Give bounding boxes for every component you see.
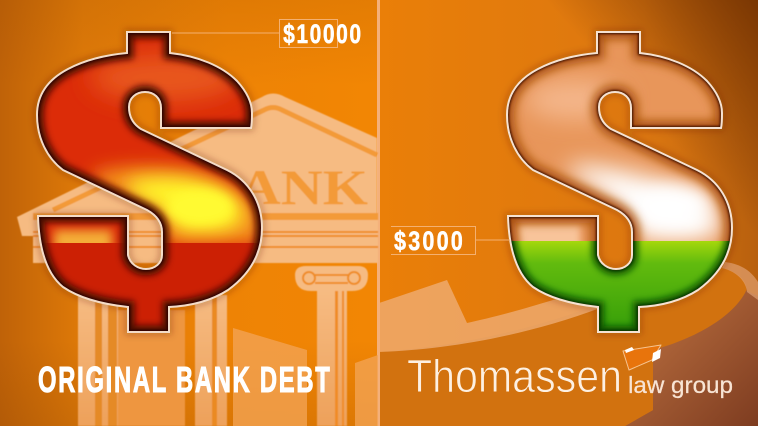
roof inner band — [53, 108, 377, 210]
background: lower right brown area — [625, 290, 758, 426]
right column — [317, 291, 347, 426]
left column — [78, 295, 118, 426]
panel: left background — [0, 0, 379, 426]
orange halo — [95, 166, 262, 243]
callout: $3000 — [391, 226, 510, 257]
left dollar sign — [30, 25, 270, 343]
logo tagline: law group — [628, 372, 733, 398]
background: orange swoosh body — [379, 268, 746, 426]
middle column — [195, 295, 227, 426]
callout: $10000: $10000 — [283, 20, 361, 50]
bank illustration — [17, 94, 378, 426]
bank roof — [17, 94, 377, 236]
divider — [377, 0, 380, 426]
column capital — [295, 266, 368, 291]
background: pale swoosh right — [722, 262, 758, 300]
yellow glow — [128, 178, 242, 231]
green fill — [511, 241, 730, 331]
logo: Thomassen law group — [407, 345, 733, 402]
bank sign: BANK — [200, 159, 368, 215]
building wall between columns — [117, 310, 185, 426]
bank entablature — [33, 213, 378, 263]
peach upper part — [508, 33, 731, 241]
logo icon: banner — [623, 345, 661, 370]
building shape bottom — [233, 328, 378, 426]
right dollar sign — [500, 25, 740, 341]
lower left glow — [54, 230, 112, 252]
callout: $10000 — [172, 20, 361, 50]
callout: $3000: $3000 — [394, 227, 463, 257]
lower band — [46, 243, 256, 326]
logo wordmark: Thomassen — [407, 350, 622, 402]
heading: original bank debt: ORIGINAL BANK DEBT — [38, 360, 330, 400]
panel: right background — [379, 0, 758, 426]
background: pale swoosh left — [379, 280, 600, 352]
upper lighter tint — [90, 54, 240, 102]
